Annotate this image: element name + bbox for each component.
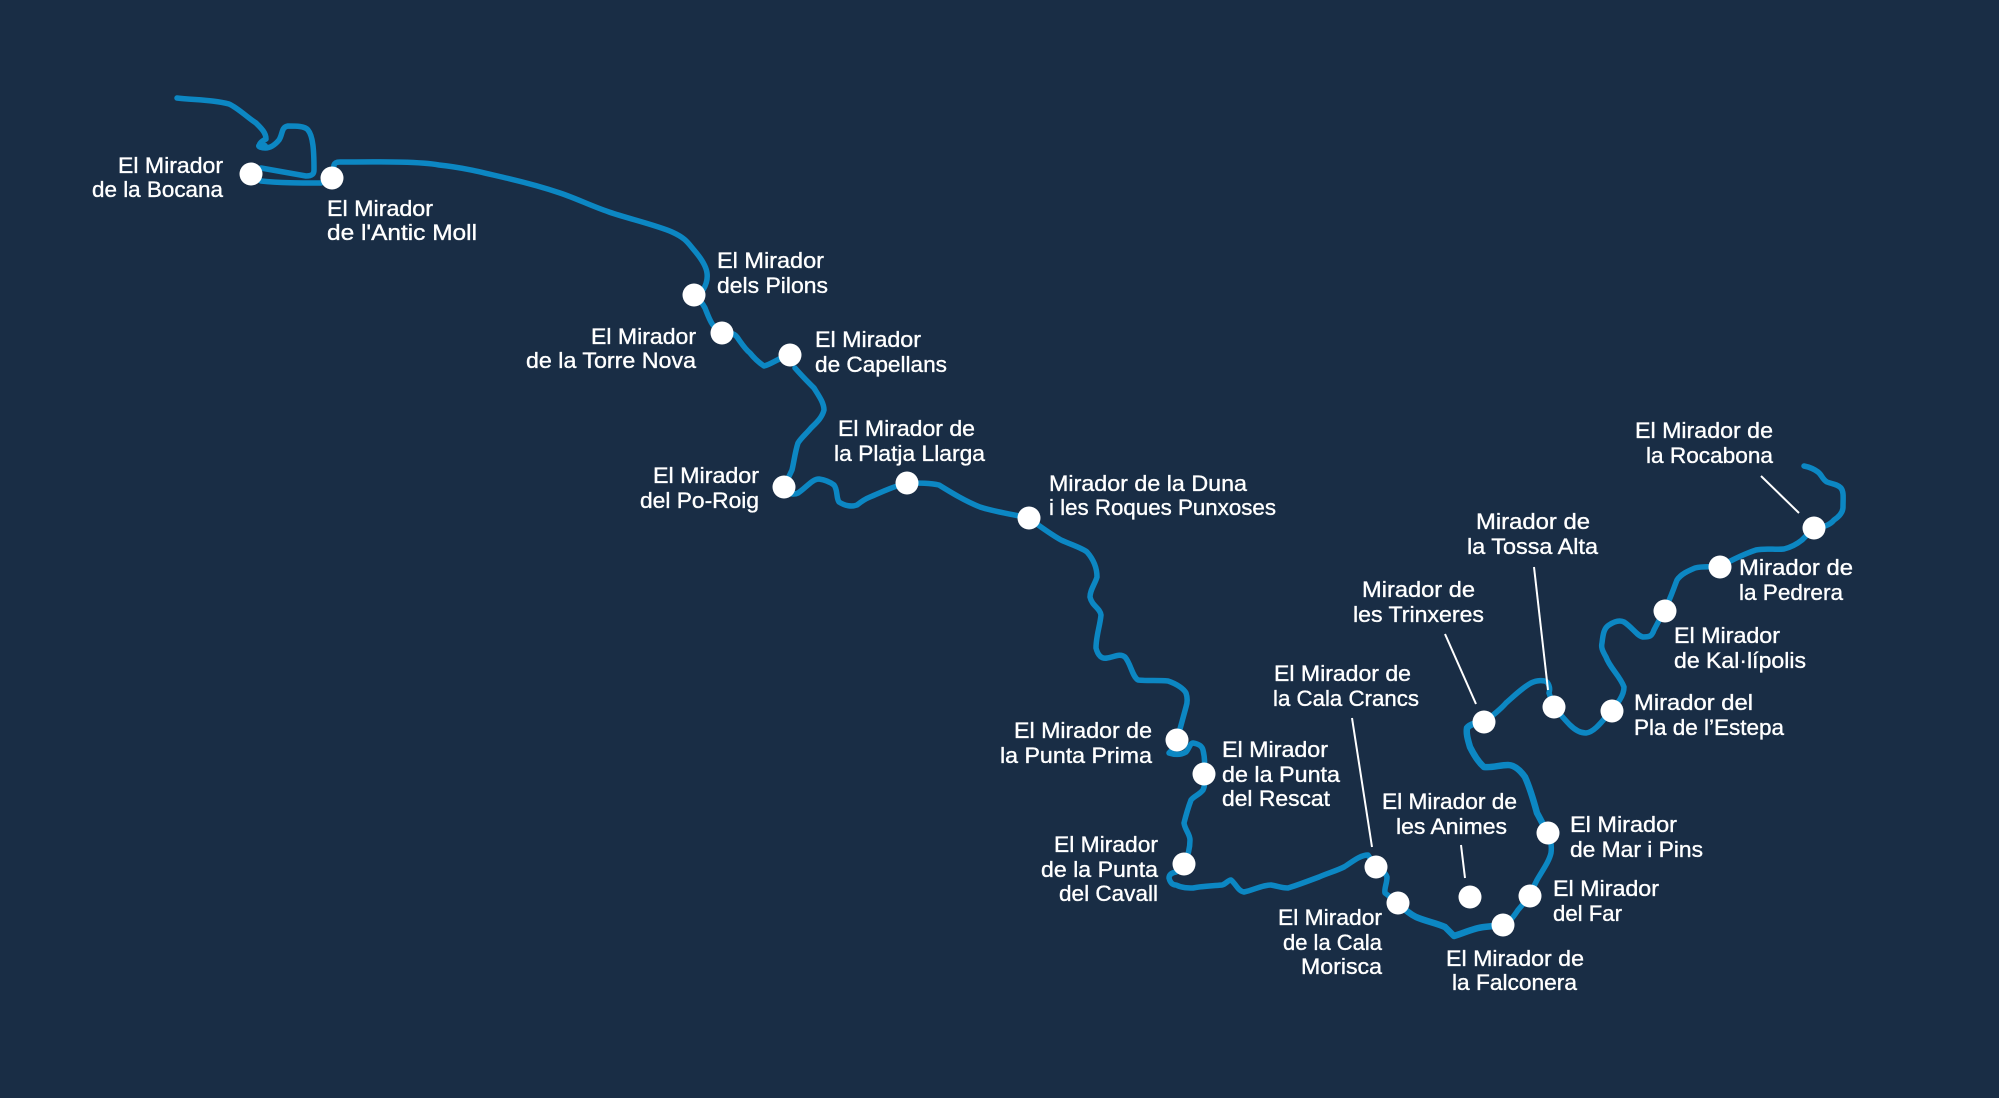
label: El Mirador de la Falconera: El Mirador de <box>1446 946 1584 971</box>
leader lines <box>1352 476 1799 878</box>
label: El Mirador de la Falconera: la Falconera <box>1452 970 1578 995</box>
label: Mirador de la Tossa Alta: la Tossa Alta <box>1467 534 1599 559</box>
label: Mirador de la Pedrera: Mirador de <box>1739 555 1853 580</box>
label: Mirador de la Tossa Alta <box>1467 509 1599 559</box>
label: El Mirador de la Punta del Rescat: del Rescat <box>1222 786 1330 811</box>
label: El Mirador de la Punta del Cavall: de la Punta <box>1041 857 1159 882</box>
label: El Mirador de Mar i Pins: El Mirador <box>1570 812 1677 837</box>
label: El Mirador de les Animes: El Mirador de <box>1382 789 1517 814</box>
label: El Mirador de la Cala Morisca: El Mirador <box>1278 905 1382 930</box>
label: Mirador de les Trinxeres <box>1353 577 1484 627</box>
label: El Mirador de la Torre Nova <box>526 324 697 373</box>
label: Mirador de les Trinxeres: Mirador de <box>1362 577 1475 602</box>
label: El Mirador de la Bocana: El Mirador <box>118 153 223 178</box>
label: El Mirador de la Rocabona: la Rocabona <box>1646 443 1774 468</box>
label: El Mirador del Po-Roig: del Po-Roig <box>640 488 759 513</box>
label: El Mirador de la Punta del Rescat <box>1222 737 1341 811</box>
label: Mirador de la Tossa Alta: Mirador de <box>1476 509 1590 534</box>
label: El Mirador de Kal·lípolis: de Kal·lípolis <box>1674 648 1806 673</box>
label: El Mirador dels Pilons: El Mirador <box>717 248 824 273</box>
label: El Mirador de Kal·lípolis: El Mirador <box>1674 623 1780 648</box>
label: El Mirador de la Torre Nova: de la Torre Nova <box>526 348 697 373</box>
label: El Mirador de la Bocana: de la Bocana <box>92 177 224 202</box>
coastal route line <box>177 98 1843 936</box>
label: El Mirador de la Cala Morisca <box>1278 905 1383 979</box>
label: El Mirador de la Punta del Rescat: de la Punta <box>1222 762 1341 787</box>
label: Mirador de la Pedrera: la Pedrera <box>1739 580 1844 605</box>
label: El Mirador de la Punta Prima: El Mirador de <box>1014 718 1152 743</box>
label: El Mirador de Capellans <box>815 327 947 377</box>
label: El Mirador de la Punta del Cavall: El Mirador <box>1054 832 1158 857</box>
label: El Mirador de les Animes <box>1382 789 1517 839</box>
label: El Mirador de la Punta Prima <box>1000 718 1153 768</box>
label: Mirador de la Duna i les Roques Punxoses: Mirador de la Duna <box>1049 471 1248 496</box>
label: El Mirador de la Cala Crancs: El Mirador de <box>1274 661 1411 686</box>
label: El Mirador de l'Antic Moll <box>327 196 477 245</box>
label: El Mirador de la Bocana <box>92 153 224 202</box>
label: El Mirador de la Punta del Cavall: del Cavall <box>1059 881 1158 906</box>
label: El Mirador de l'Antic Moll: El Mirador <box>327 196 433 221</box>
label: El Mirador de Capellans: de Capellans <box>815 352 947 377</box>
label: El Mirador de les Animes: les Animes <box>1396 814 1507 839</box>
label: El Mirador de la Punta del Rescat: El Mirador <box>1222 737 1328 762</box>
label: El Mirador del Far <box>1553 876 1659 926</box>
label: Mirador de la Duna i les Roques Punxoses <box>1049 471 1276 520</box>
label: Mirador de la Pedrera <box>1739 555 1853 605</box>
label: El Mirador del Po-Roig <box>640 463 759 513</box>
label: El Mirador de la Platja Llarga: El Mirador de <box>838 416 975 441</box>
label: El Mirador de Mar i Pins <box>1570 812 1703 862</box>
label: El Mirador de la Platja Llarga: la Platja Llarga <box>834 441 986 466</box>
label: El Mirador de la Cala Morisca: Morisca <box>1301 954 1383 979</box>
label: El Mirador de Kal·lípolis <box>1674 623 1806 673</box>
label: El Mirador del Far: El Mirador <box>1553 876 1659 901</box>
label: Mirador de les Trinxeres: les Trinxeres <box>1353 602 1484 627</box>
label: El Mirador dels Pilons <box>717 248 828 298</box>
label: Mirador del Pla de l'Estepa: Mirador del <box>1634 690 1753 715</box>
label: El Mirador de la Cala Morisca: de la Cala <box>1283 930 1383 955</box>
label: El Mirador dels Pilons: dels Pilons <box>717 273 828 298</box>
label: El Mirador de Mar i Pins: de Mar i Pins <box>1570 837 1703 862</box>
label: El Mirador del Po-Roig: El Mirador <box>653 463 759 488</box>
viewpoint markers <box>240 162 1826 936</box>
label: El Mirador de la Falconera <box>1446 946 1584 995</box>
label: El Mirador de la Rocabona: El Mirador de <box>1635 418 1773 443</box>
label: El Mirador de Capellans: El Mirador <box>815 327 921 352</box>
label: El Mirador de la Rocabona <box>1635 418 1774 468</box>
label: El Mirador de la Punta Prima: la Punta Prima <box>1000 743 1153 768</box>
label: Mirador del Pla de l'Estepa <box>1634 690 1785 740</box>
label: Mirador de la Duna i les Roques Punxoses: i les Roques Punxoses <box>1049 495 1276 520</box>
label: El Mirador de l'Antic Moll: de l'Antic Moll <box>327 220 477 245</box>
label: El Mirador del Far: del Far <box>1553 901 1622 926</box>
label: El Mirador de la Torre Nova: El Mirador <box>591 324 696 349</box>
label: El Mirador de la Punta del Cavall <box>1041 832 1159 906</box>
label: El Mirador de la Cala Crancs <box>1273 661 1419 711</box>
label: El Mirador de la Platja Llarga <box>834 416 986 466</box>
label: El Mirador de la Cala Crancs: la Cala Crancs <box>1273 686 1419 711</box>
label: Mirador del Pla de l'Estepa: Pla de l’Estepa <box>1634 715 1785 740</box>
